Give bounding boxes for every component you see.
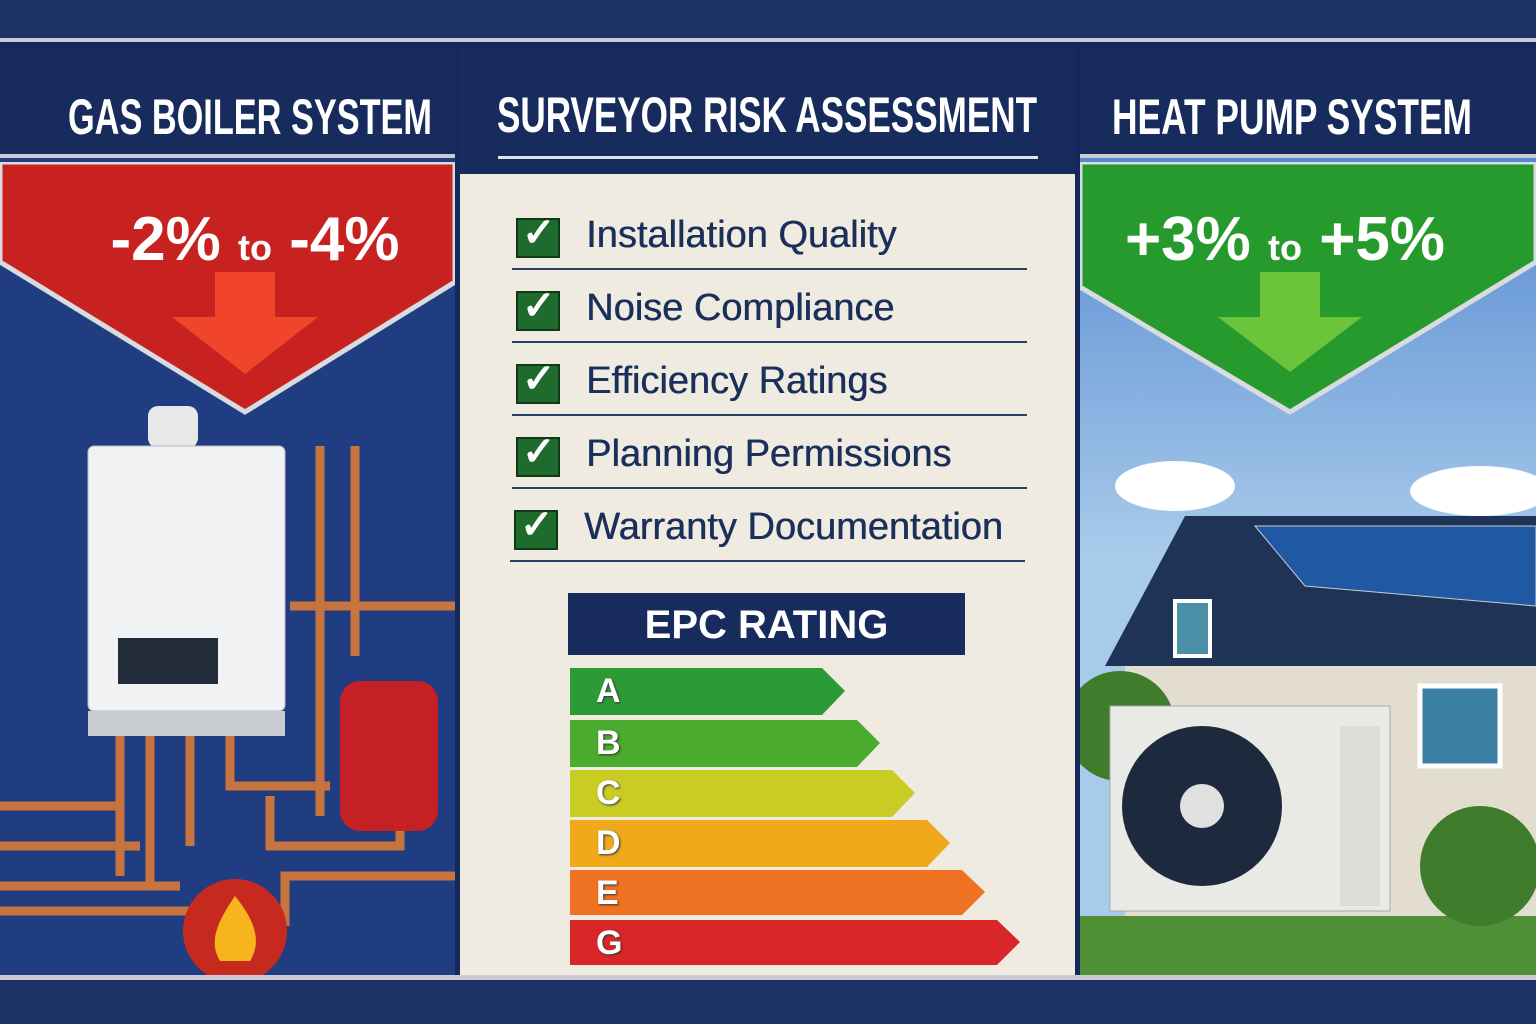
heading: heat pump system xyxy=(1080,46,1536,158)
item: warranty documentation xyxy=(510,492,1025,562)
checklist xyxy=(510,211,1534,940)
EPC heading xyxy=(568,593,965,655)
item: installation quality: Installation Quality xyxy=(586,214,896,256)
EPC heading: EPC RATING xyxy=(645,603,888,647)
EPC chart: C xyxy=(596,774,621,812)
item: installation quality: ✓ xyxy=(522,211,556,255)
EPC chart: G xyxy=(596,924,622,962)
EPC chart: B xyxy=(596,724,621,762)
icon: boiler with pipes xyxy=(0,406,455,975)
panel: gas boiler xyxy=(0,46,455,975)
green banner with value: +3% to +5% xyxy=(1125,205,1445,274)
EPC chart: D xyxy=(596,824,621,862)
top band xyxy=(0,0,1536,42)
item: planning permissions xyxy=(512,419,1027,489)
panel: heat pump xyxy=(1080,46,1536,975)
illustration: house with heat pump xyxy=(1080,461,1536,975)
item: planning permissions: ✓ xyxy=(522,430,556,474)
item: noise compliance: Noise Compliance xyxy=(586,287,894,329)
heading: surveyor risk assessment xyxy=(460,46,1075,174)
item: efficiency ratings xyxy=(512,346,1027,416)
item: noise compliance: ✓ xyxy=(522,284,556,328)
item: warranty documentation: Warranty Documentation xyxy=(584,506,1003,548)
red banner with value xyxy=(0,162,455,415)
green banner with value xyxy=(1080,162,1536,415)
heading: gas boiler system xyxy=(0,46,455,158)
EPC chart: E xyxy=(596,874,619,912)
item: warranty documentation: ✓ xyxy=(520,503,554,547)
EPC chart xyxy=(570,668,1020,965)
red banner with value: -2% to -4% xyxy=(111,205,399,274)
EPC chart: A xyxy=(596,672,621,710)
item: noise compliance xyxy=(512,273,1027,343)
item: efficiency ratings: Efficiency Ratings xyxy=(586,360,887,402)
panel: surveyor risk assessment xyxy=(460,46,1075,975)
bottom band xyxy=(0,975,1536,1024)
item: installation quality xyxy=(512,200,1027,270)
item: planning permissions: Planning Permissions xyxy=(586,433,951,475)
item: efficiency ratings: ✓ xyxy=(522,357,556,401)
